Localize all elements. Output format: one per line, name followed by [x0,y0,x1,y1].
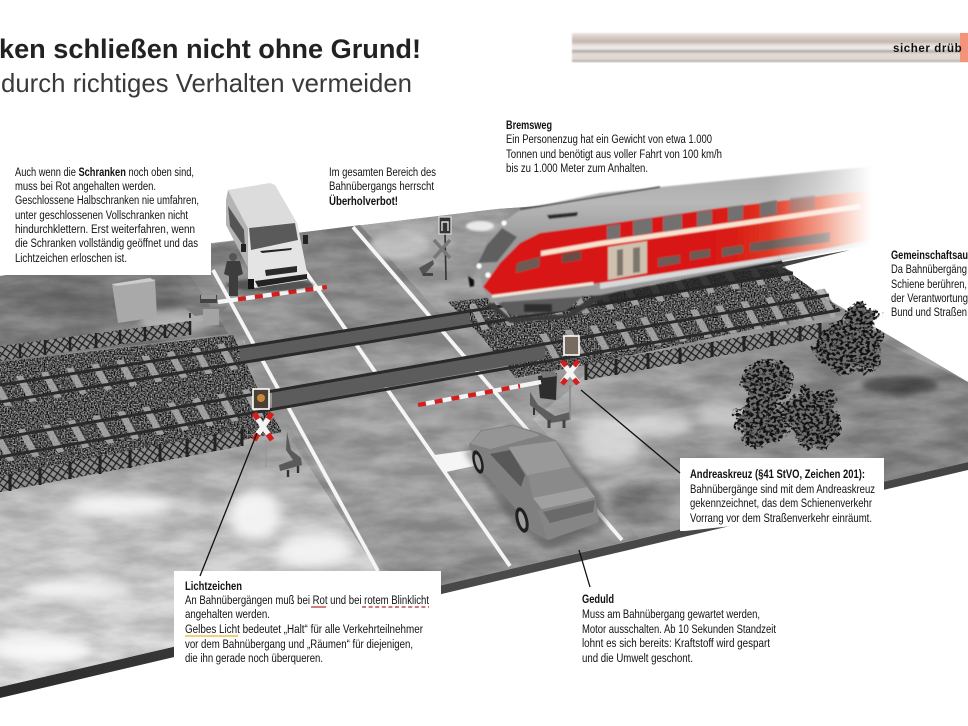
white text panel: Andreaskreuz [680,458,884,531]
leader line: Geduld [579,550,590,587]
text block: Andreaskreuz: Andreaskreuz (§41 StVO, Zeichen 201): [690,467,865,481]
far barrier with machine [185,287,327,325]
text block: Lichtzeichen: angehalten werden. [185,607,270,621]
crossing plate front [272,342,545,408]
subtitle: durch richtiges Verhalten vermeiden [1,68,412,98]
text block: Überholverbot [329,165,436,208]
leader line: Lichtzeichen [200,433,257,576]
upper deck windows [607,195,815,240]
text block: Geduld: Muss am Bahnübergang gewartet werden, [582,607,760,621]
front left fence [0,429,242,492]
text block: Bremsweg [506,118,722,175]
front right fence [586,323,820,380]
ballast right [448,267,842,378]
text block: Andreaskreuz: gekennzeichnet, das dem Schienenverkehr [690,496,872,510]
slab side edge [0,462,968,698]
text block: Lichtzeichen: Gelbes Licht bedeutet „Halt“ für alle Verkehrteilnehmer [185,622,423,636]
front left signal with warning light and cross [253,389,302,477]
cab windows [516,257,540,273]
text block: Schranken: muss bei Rot angehalten werden. [15,179,156,193]
train undercarriage [488,290,620,323]
white text panel: Schranken [0,140,211,275]
title: ken schließen nicht ohne Grund! [0,34,421,64]
text block: Geduld: Motor ausschalten. Ab 10 Sekunden Standzeit [582,622,776,636]
ground base [0,195,968,687]
text block: Andreaskreuz: Bahnübergänge sind mit dem Andreaskreuz [690,482,875,496]
text block: Andreaskreuz [690,467,875,525]
ground light and dark patches [0,180,968,700]
text block: Schranken: die Schranken vollständig geöffnet und das [15,236,198,250]
text block: Geduld [582,592,776,665]
van [226,183,314,291]
leader line: Andreaskreuz [581,390,680,473]
front right signal, cross and barrier [418,336,579,428]
relay cabinet [112,278,157,323]
text block: Überholverbot: Überholverbot! [329,193,398,208]
front right lawn [525,320,968,543]
text block: Schranken: Geschlossene Halbschranken nie umfahren, [15,193,199,207]
lower light skirt [599,243,861,290]
text block: Lichtzeichen: die ihn gerade noch überqueren. [185,651,323,665]
text block: Lichtzeichen: Lichtzeichen [185,579,242,593]
banner label: sicher drüb [893,43,962,55]
door [608,241,647,280]
text block: Lichtzeichen [185,579,429,665]
text block: Schranken: unter geschlossenen Vollschranken nicht [15,208,188,222]
lower deck windows [658,232,830,267]
back left fence [0,321,190,361]
text block: Andreaskreuz: Vorrang vor dem Straßenverkehr einräumt. [690,511,872,525]
text block: Gemeinschaftsaufgabe [891,248,968,319]
car [464,424,606,548]
text block: Schranken: hindurchklettern. Erst weiterfahren, wenn [15,222,195,236]
text block: Geduld: Geduld [582,592,614,606]
back left lawn [0,243,235,362]
text block: Lichtzeichen: vor dem Bahnübergang und „Räumen“ für diejenigen, [185,637,413,651]
windscreen [478,228,517,263]
shadow under train [590,250,850,306]
header strip: blurred train banner [572,33,968,62]
cyclist person [224,253,243,296]
road surface [190,225,640,595]
text block: Schranken: Lichtzeichen erloschen ist. [15,251,127,265]
text block: Schranken: Auch wenn die Schranken noch oben sind, [15,165,194,179]
text block: Überholverbot: Im gesamten Bereich des [329,165,436,179]
text block: Bremsweg: Tonnen und benötigt aus voller Fahrt von 100 km/h [506,147,722,161]
train red livery [483,190,870,295]
back middle lawn [355,195,700,300]
text block: Bremsweg: bis zu 1.000 Meter zum Anhalten. [506,161,648,175]
white text panel: Lichtzeichen [174,571,441,681]
rails [0,262,840,457]
text block: Überholverbot: Bahnübergangs herrscht [329,179,434,193]
bushes [734,302,886,450]
railway crossing diorama [0,165,968,700]
light stripe [541,204,860,256]
text block: Geduld: und die Umwelt geschont. [582,651,693,665]
headlights [501,220,507,226]
stop line [434,450,474,472]
road markings [213,227,622,571]
text block: Bremsweg: Bremsweg [506,118,552,132]
back signal and cross [419,217,451,280]
sleepers [0,252,835,463]
crossing plate back [240,310,470,364]
train body silver [477,165,890,303]
front left lawn [0,430,420,687]
ballast left [0,335,282,492]
text block: Geduld: lohnt es sich bereits: Kraftstoff wird gespart [582,636,770,650]
text block: Lichtzeichen: An Bahnübergängen muß bei Rot und bei rotem Blinklicht [185,593,429,607]
train [468,165,890,323]
lower white stripe [492,282,594,298]
text block: Schranken [15,165,199,265]
text block: Bremsweg: Ein Personenzug hat ein Gewicht von etwa 1.000 [506,132,712,146]
